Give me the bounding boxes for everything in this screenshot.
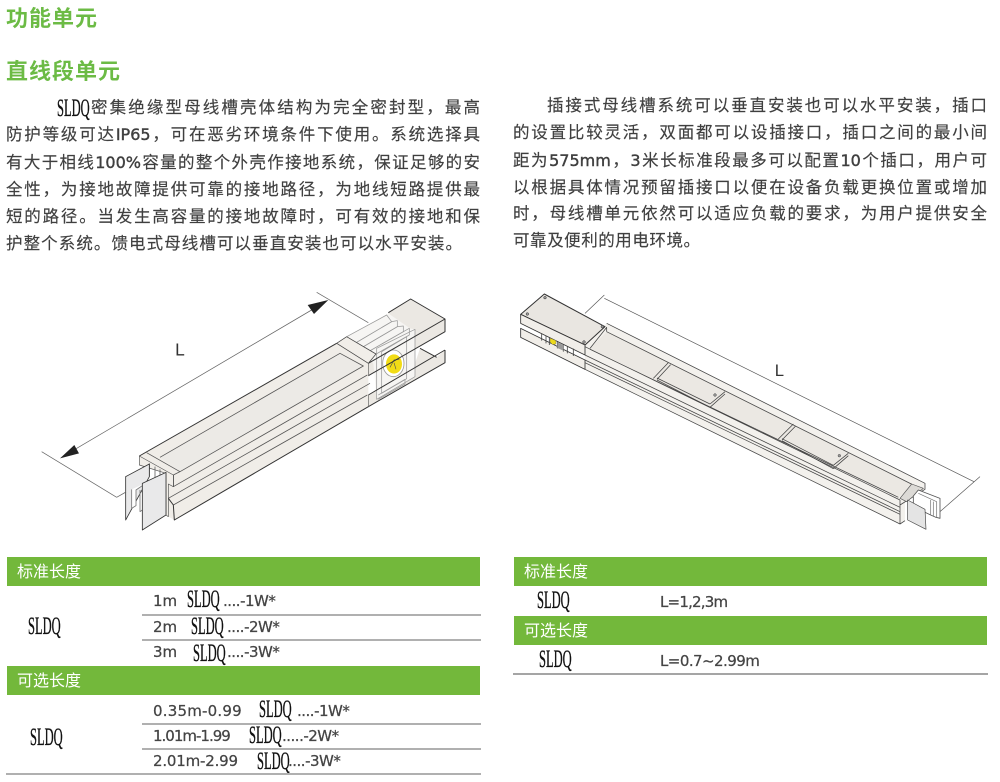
text block: left description: 短的路径。当发生高容量的接地故障时，可有效的接地和保	[6, 207, 480, 226]
row: 2.01m-2.99	[153, 748, 340, 775]
row: standard length value	[537, 587, 727, 614]
row: 3m: 3m	[153, 643, 177, 661]
row: 0.35m-0.99: ....-1W*	[297, 702, 349, 720]
text block: right description: 以根据具体情况预留插接口以便在设备负载更换位置或增加	[513, 178, 987, 197]
text block: right description: 时，母线槽单元依然可以适应负载的要求，为用户提供安全	[513, 204, 987, 223]
diagram: feeder busway with L dimension	[42, 292, 446, 530]
header: optional length: 可选长度	[524, 623, 588, 640]
busway long body	[585, 323, 925, 524]
row: 1.01m-1.99: 1.01m-1.99	[153, 727, 230, 745]
row: optional length value	[539, 646, 759, 673]
row: 2m: SLDQ	[191, 613, 224, 640]
row: 3m	[153, 640, 280, 667]
row: 1.01m-1.99	[153, 722, 339, 749]
text block: left description: 防护等级可达IP65，可在恶劣环境条件下使用。系统选择具	[6, 125, 480, 144]
right copper connector	[900, 484, 940, 529]
text block: left description: 密集绝缘型母线槽壳体结构为完全密封型，最高	[91, 98, 480, 117]
table: right lengths	[513, 557, 988, 675]
header: standard length	[514, 557, 987, 586]
yellow bolt	[383, 350, 404, 377]
header: optional length	[514, 616, 987, 645]
yellow bolt	[550, 338, 556, 345]
heading: straight section units: 直线段单元	[6, 59, 121, 84]
heading: functional units: 功能单元	[6, 6, 98, 31]
brand name: SLDQ	[30, 724, 63, 751]
header: optional length	[7, 666, 480, 695]
plug-in box 2	[778, 424, 848, 469]
row: 2.01m-2.99: SLDQ	[257, 748, 290, 775]
left end cap	[521, 294, 607, 369]
connector end of feeder busway	[347, 299, 445, 407]
row: optional length value: L=0.7~2.99m	[660, 652, 759, 670]
brand name: SLDQ	[28, 613, 61, 640]
text block: left description	[6, 95, 480, 253]
row: 1.01m-1.99: .....-2W*	[282, 727, 339, 745]
table: left lengths	[6, 557, 481, 775]
brand name inline: SLDQ	[57, 95, 90, 122]
text block: right description: 可靠及便利的用电环境。	[513, 231, 700, 250]
row: 0.35m-0.99	[153, 696, 350, 723]
row: 2m: ....-2W*	[227, 618, 279, 636]
row: 1m: ....-1W*	[223, 592, 275, 610]
text block: right description	[513, 96, 987, 250]
header: standard length	[7, 557, 480, 586]
text block: right description: 距为575mm，3米长标准段最多可以配置10个插口，用户可	[513, 151, 987, 170]
dimension label L: L	[175, 340, 185, 360]
text block: right description: 的设置比较灵活，双面都可以设插接口，插口之间的最小间	[513, 123, 987, 142]
row: optional length value: SLDQ	[539, 646, 572, 673]
row: 1m: SLDQ	[187, 586, 220, 613]
row: 0.35m-0.99: 0.35m-0.99	[153, 702, 242, 720]
text block: left description: 有大于相线100%容量的整个外壳作接地系统，保证足够的安	[6, 153, 480, 172]
row: 2.01m-2.99: ....-3W*	[288, 752, 340, 770]
header: optional length: 可选长度	[17, 673, 81, 690]
row: 2.01m-2.99: 2.01m-2.99	[153, 752, 238, 770]
text block: left description: 护整个系统。馈电式母线槽可以垂直安装也可以水平安装。	[6, 234, 462, 253]
copper bar end	[126, 456, 173, 530]
row: 1m	[153, 586, 276, 613]
dimension lines	[585, 295, 980, 512]
text block: left description: 全性，为接地故障提供可靠的接地路径，为地线短路提供最	[6, 180, 480, 199]
row: 1.01m-1.99: SLDQ	[249, 722, 282, 749]
row: 2m	[153, 613, 280, 640]
row: 2m: 2m	[153, 618, 177, 636]
row: 1m: 1m	[153, 592, 177, 610]
row: 0.35m-0.99: SLDQ	[259, 696, 292, 723]
text block: right description: 插接式母线槽系统可以垂直安装也可以水平安装，插口	[547, 96, 987, 115]
row: 3m: SLDQ	[193, 640, 226, 667]
diagram: plug-in busway with L dimension	[520, 294, 980, 530]
busway body	[139, 337, 376, 520]
dimension line with arrows	[42, 292, 368, 497]
row: 3m: ....-3W*	[227, 643, 279, 661]
dimension label L: L	[775, 361, 784, 380]
row: standard length value: SLDQ	[537, 587, 570, 614]
plug-in box 1	[653, 363, 725, 407]
header: standard length: 标准长度	[17, 564, 81, 581]
row: standard length value: L=1,2,3m	[660, 593, 727, 611]
header: standard length: 标准长度	[524, 564, 588, 581]
